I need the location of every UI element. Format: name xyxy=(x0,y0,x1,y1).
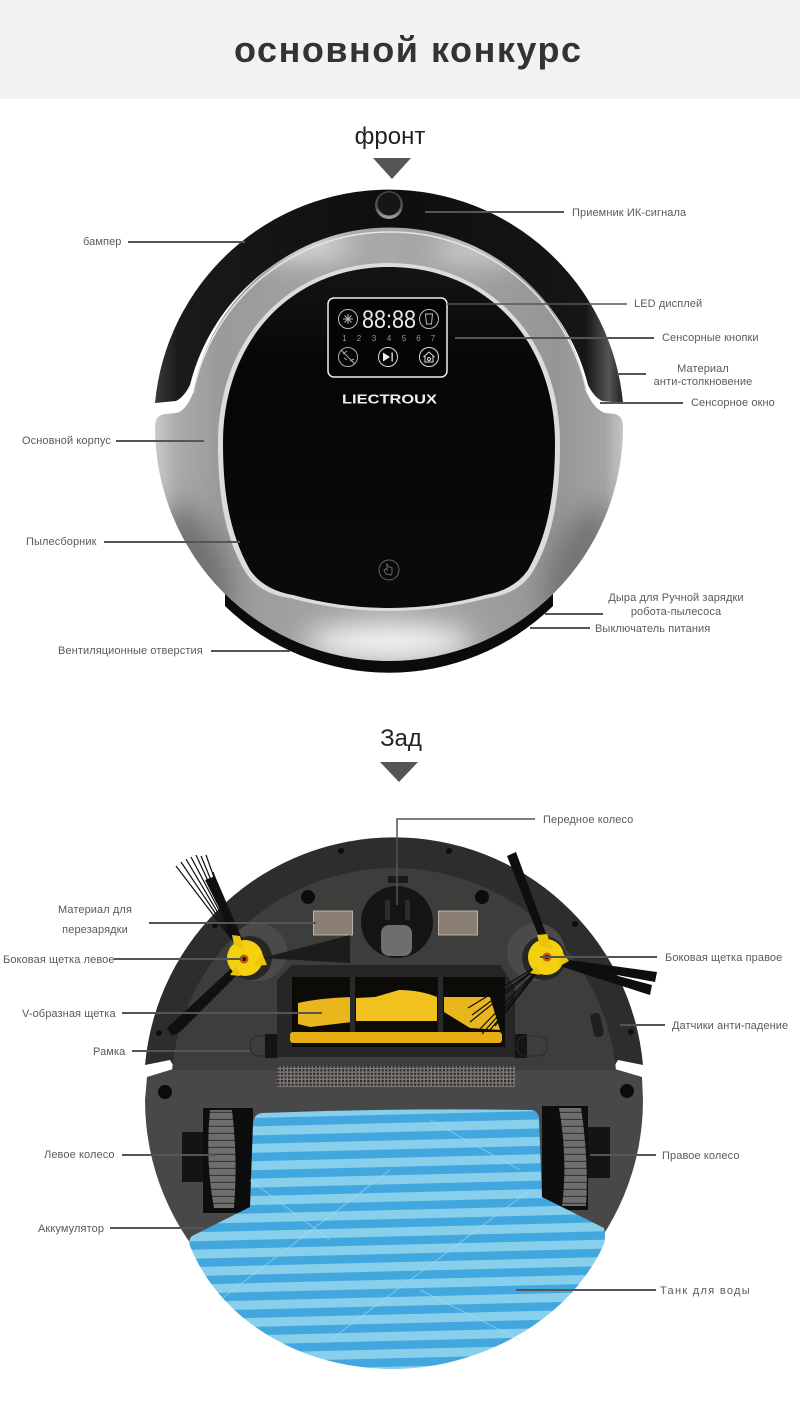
callout: left wheel: Левое колесо xyxy=(44,1149,115,1161)
callout: anti-collision material: Материал xyxy=(677,363,729,375)
header band xyxy=(0,0,800,99)
left side brush bristles xyxy=(167,855,350,1036)
callout: touch buttons: Сенсорные кнопки xyxy=(662,332,759,344)
display digits: 88:88 xyxy=(362,306,416,334)
callout: vents: Вентиляционные отверстия xyxy=(58,645,203,657)
callout: LED display: LED дисплей xyxy=(634,298,702,310)
mop pad xyxy=(189,1109,605,1369)
callout: front wheel: Передное колесо xyxy=(543,814,633,826)
front robot xyxy=(151,190,625,673)
callout: charging hole xyxy=(545,592,744,618)
callout: anti-collision material xyxy=(617,363,752,388)
icon: sweep mode xyxy=(338,310,358,328)
exhaust vent xyxy=(277,1066,515,1087)
callouts: front xyxy=(22,207,775,657)
callout: right wheel: Правое колесо xyxy=(662,1150,740,1162)
callout: IR receiver: Приемник ИК-сигнала xyxy=(572,207,687,219)
callout: V brush: V-образная щетка xyxy=(22,1008,116,1020)
callout: charging hole: Дыра для Ручной зарядки xyxy=(608,592,744,604)
icon: no mop xyxy=(338,348,358,366)
callout: charging material: Материал для xyxy=(58,904,132,916)
day numbers: 3 xyxy=(372,334,377,343)
screw holes xyxy=(156,848,634,1099)
callout: frame: Рамка xyxy=(93,1046,126,1058)
heading: back: Зад xyxy=(380,725,422,752)
brush frame xyxy=(277,965,515,1057)
callout: right side brush: Боковая щетка правое xyxy=(665,952,782,964)
back robot xyxy=(145,837,657,1369)
base shadow xyxy=(225,590,553,673)
icon: home xyxy=(420,348,438,366)
day numbers: 1 xyxy=(342,334,347,343)
right side brush bristles xyxy=(468,852,657,1034)
callout: cliff sensors: Датчики анти-падение xyxy=(672,1020,788,1032)
icon: play pause xyxy=(378,348,398,366)
black panel xyxy=(223,267,555,608)
bumper xyxy=(155,190,623,403)
left side brush hub xyxy=(227,935,267,976)
heading: front: фронт xyxy=(355,123,425,150)
day numbers: 4 xyxy=(387,334,392,343)
day numbers: 6 xyxy=(416,334,421,343)
lower body xyxy=(145,1066,643,1349)
day numbers: 7 xyxy=(431,334,436,343)
brush cavity xyxy=(292,977,505,1047)
left wheel xyxy=(182,1108,253,1213)
callouts: back xyxy=(3,814,788,1297)
latches xyxy=(250,1034,547,1058)
right wheel xyxy=(542,1106,610,1210)
callout: charging hole: робота-пылесоса xyxy=(631,606,722,618)
callout: power switch: Выключатель питания xyxy=(595,623,710,635)
arrow: back xyxy=(380,762,418,782)
callout: sensor window: Сенсорное окно xyxy=(691,397,775,409)
arrow: front xyxy=(373,158,411,179)
day numbers: 5 xyxy=(402,334,407,343)
callout: front wheel xyxy=(397,814,633,905)
callout: charging material: перезарядки xyxy=(62,924,128,936)
logo: LIECTROUX xyxy=(342,392,438,406)
front wheel xyxy=(361,876,433,958)
title: основной конкурс xyxy=(234,29,581,70)
callout: bumper: бампер xyxy=(83,236,122,248)
upper shell xyxy=(145,837,643,1070)
LED display panel xyxy=(328,298,447,377)
icon: touch xyxy=(379,560,399,580)
right side brush hub xyxy=(528,934,569,975)
callout: charging material xyxy=(58,904,316,936)
callout: anti-collision material: анти-столкновение xyxy=(654,376,752,388)
mop seams xyxy=(220,1120,530,1340)
V roller brush xyxy=(290,977,502,1043)
charging plates xyxy=(314,911,478,935)
icon: dustbin xyxy=(420,310,438,328)
cliff sensor xyxy=(590,1012,604,1038)
silver body xyxy=(151,228,625,661)
day numbers: 2 xyxy=(357,334,362,343)
IR receiver xyxy=(375,191,403,219)
callout: water tank: Танк для воды xyxy=(660,1285,751,1297)
top panel chrome rim xyxy=(218,263,560,611)
callout: main body: Основной корпус xyxy=(22,435,111,447)
inner panel xyxy=(172,868,616,1070)
callout: left side brush: Боковая щетка левое xyxy=(3,954,115,966)
brush recesses xyxy=(229,923,287,981)
day numbers xyxy=(342,334,436,343)
callout: battery: Аккумулятор xyxy=(38,1223,104,1235)
callout: dust bin: Пылесборник xyxy=(26,536,97,548)
